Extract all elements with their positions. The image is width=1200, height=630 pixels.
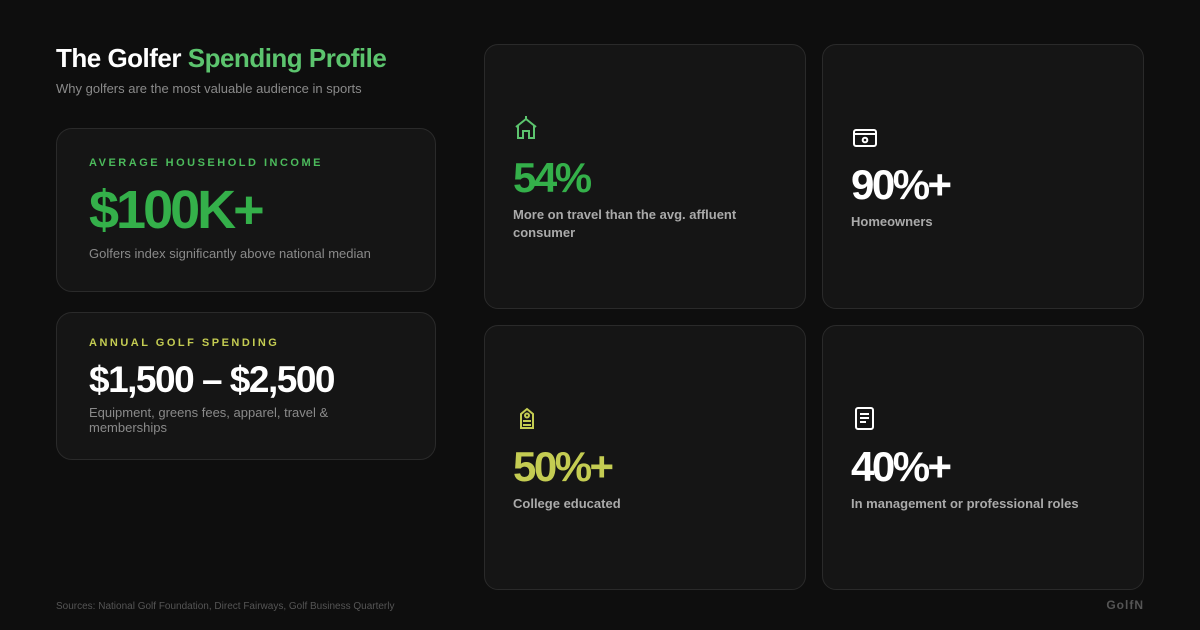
label: ANNUAL GOLF SPENDING — [89, 337, 279, 349]
description: More on travel than the avg. affluent — [513, 207, 736, 222]
brand: GolfN — [1106, 598, 1144, 612]
icon: tag — [520, 408, 534, 429]
panel: college — [484, 325, 806, 590]
stat: 90%+ — [851, 161, 950, 208]
value: $100K+ — [89, 180, 262, 240]
icon: house — [515, 116, 536, 139]
title: The Golfer Spending Profile — [56, 43, 386, 73]
sources: Sources: National Golf Foundation, Direct Fairways, Golf Business Quarterly — [56, 601, 394, 612]
icon: document — [855, 407, 874, 430]
value: $1,500 – $2,500 — [89, 359, 334, 400]
description — [513, 207, 736, 240]
subtitle: Why golfers are the most valuable audience in sports — [56, 81, 362, 96]
label: AVERAGE HOUSEHOLD INCOME — [89, 157, 323, 169]
stat: 50%+ — [513, 443, 612, 490]
description: Equipment, greens fees, apparel, travel & memberships — [89, 405, 328, 435]
icon: card — [853, 129, 877, 147]
description: Homeowners — [851, 214, 933, 229]
stat: 54% — [513, 154, 590, 201]
panel: household income — [56, 128, 436, 292]
stat: 40%+ — [851, 443, 950, 490]
description: consumer — [513, 225, 575, 240]
description: College educated — [513, 496, 621, 511]
description: In management or professional roles — [851, 496, 1079, 511]
panel: golf spending — [56, 312, 436, 460]
panel: travel — [484, 44, 806, 309]
panel: homeowners — [822, 44, 1144, 309]
description: Golfers index significantly above national median — [89, 246, 371, 261]
panel: management — [822, 325, 1144, 590]
